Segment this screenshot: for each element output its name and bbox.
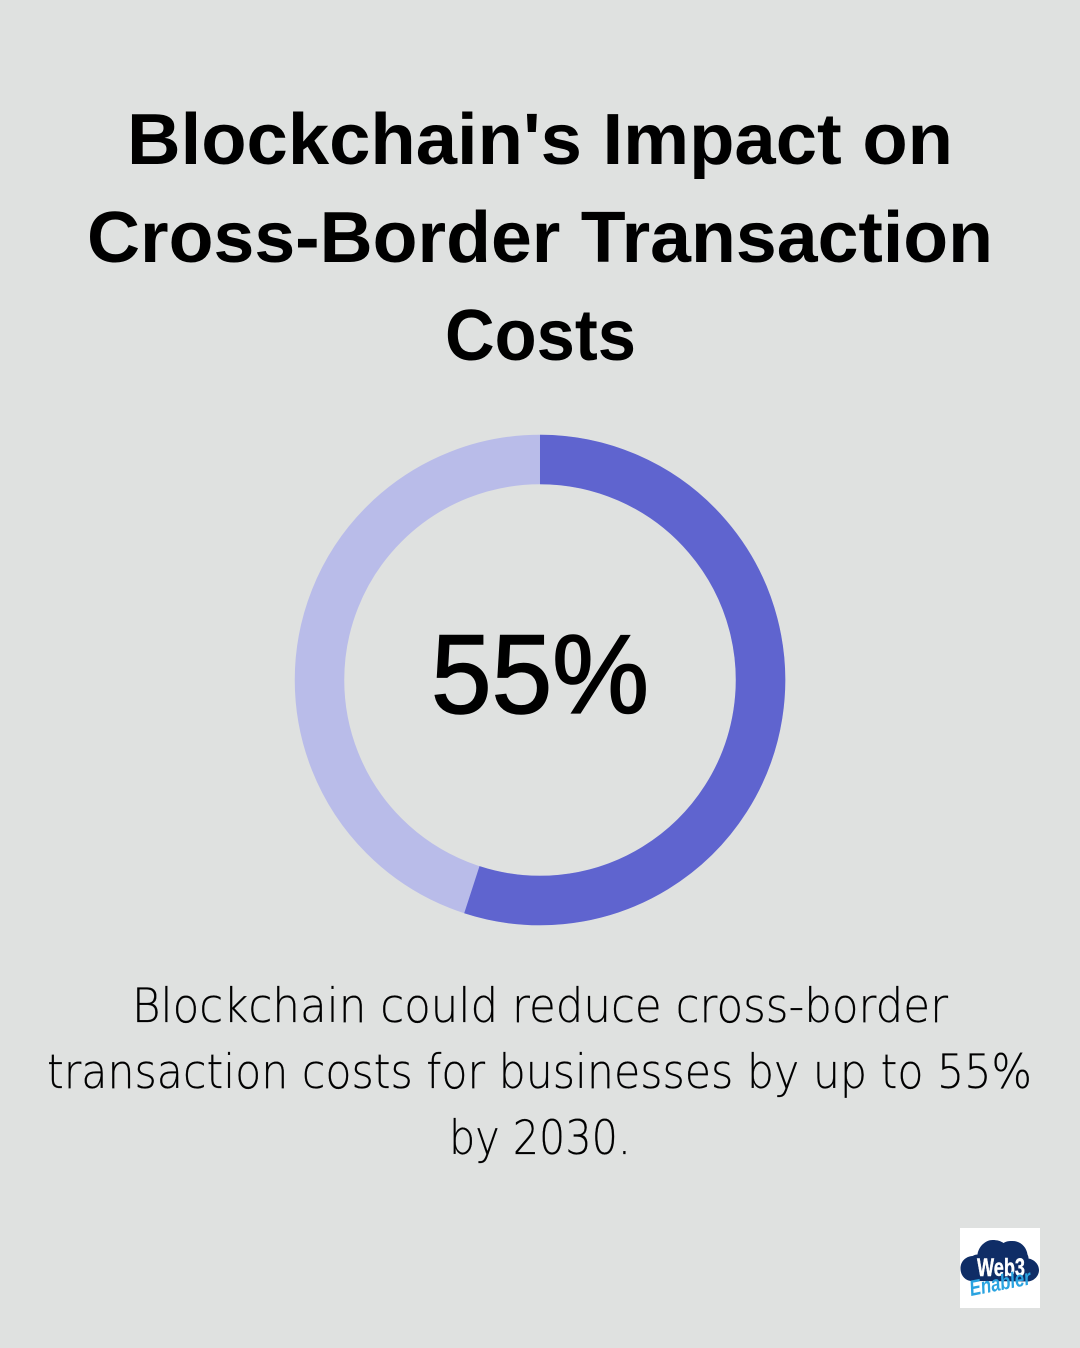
- logo background: [960, 1228, 1040, 1308]
- donut centre value: 55%: [431, 612, 649, 737]
- description text: Blockchain could reduce cross-border: [132, 979, 949, 1034]
- donut chart: 55%: [320, 460, 761, 900]
- title: Costs: [445, 296, 636, 376]
- icon: cloud: [960, 1240, 1039, 1282]
- title: Cross-Border Transaction: [87, 198, 993, 278]
- logo: Web3 Enabler: [960, 1228, 1040, 1308]
- logo word: Enabler: Enabler: [967, 1264, 1034, 1301]
- logo word: Web3: Web3: [977, 1254, 1025, 1282]
- description text: by 2030.: [449, 1111, 631, 1166]
- donut remainder segment: [320, 460, 760, 900]
- donut 55% segment: [472, 460, 761, 900]
- description text: [47, 979, 1032, 1166]
- title: Blockchain's Impact on: [127, 100, 953, 180]
- title: [87, 100, 993, 376]
